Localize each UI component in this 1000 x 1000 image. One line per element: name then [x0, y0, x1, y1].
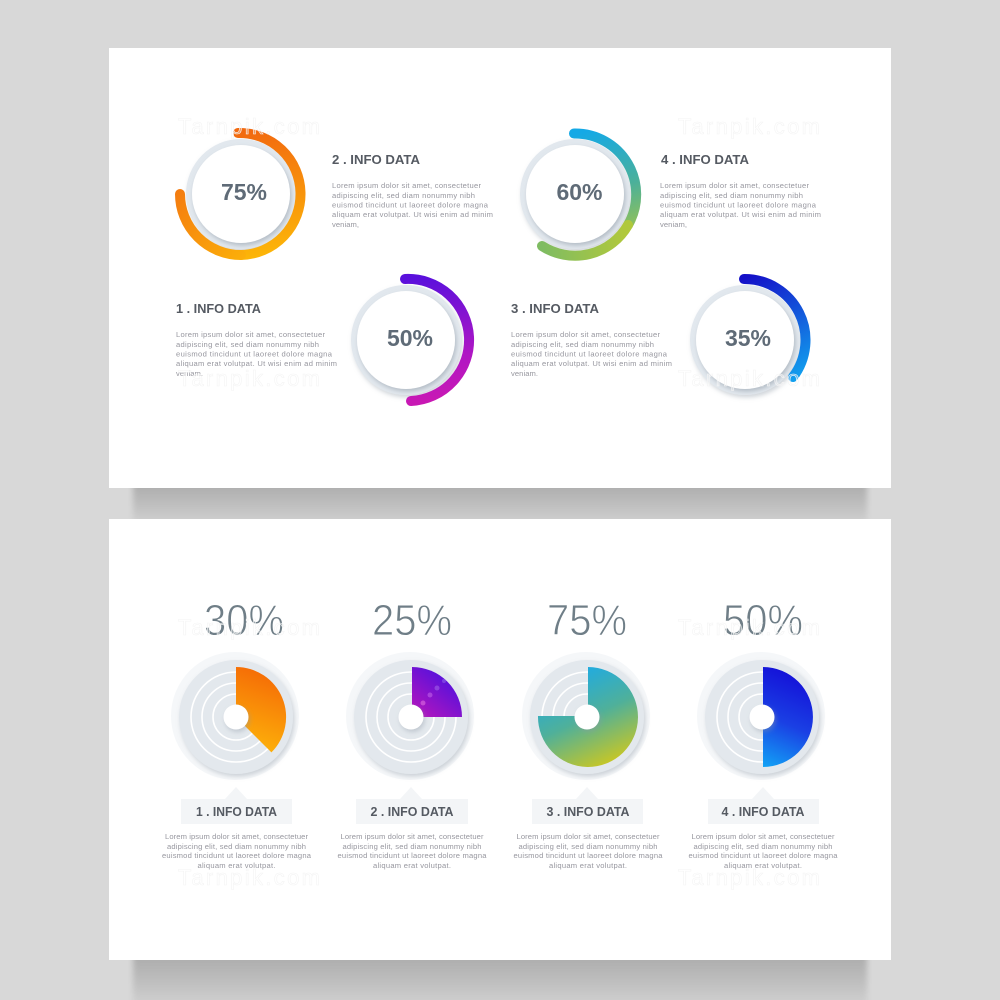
label: 2. info data: 2 . INFO DATA: [370, 805, 454, 819]
text block: column 4: aliquam erat volutpat.: [724, 861, 802, 870]
ring chart: 75%: [180, 133, 301, 255]
label: 1. info data: 1 . INFO DATA: [196, 805, 277, 819]
text block: column 4: [688, 832, 838, 870]
watermarks: Tarnpik.com: [178, 615, 320, 640]
text block: info 2: euismod tincidunt ut laoreet dolore magna: [332, 200, 489, 210]
panel: top ring charts: [109, 48, 891, 488]
text block: column 3: [514, 832, 663, 870]
label box: 1. info data: [181, 787, 292, 824]
label: 4. info data: 4 . INFO DATA: [722, 805, 804, 819]
text block: info 2: [332, 181, 493, 229]
text block: info 3: Lorem ipsum dolor sit amet, consectetuer: [511, 330, 660, 339]
heading: 3. info data: 3 . INFO DATA: [511, 302, 599, 316]
text block: column 3: aliquam erat volutpat.: [549, 861, 627, 870]
text block: info 1: veniam.: [176, 369, 203, 378]
watermarks: Tarnpik.com: [178, 114, 320, 139]
text block: column 3: adipiscing elit, sed diam nonummy nibh: [518, 842, 658, 851]
column 3: [514, 596, 663, 870]
text block: info 4: veniam,: [660, 220, 687, 229]
text block: info 4: [660, 181, 821, 229]
ring chart: 50%: [351, 279, 469, 401]
heading: 4. info data: 4 . INFO DATA: [661, 153, 749, 167]
text block: info 4: adipiscing elit, sed diam nonummy nibh: [660, 191, 803, 200]
heading: 1. info data: 1 . INFO DATA: [176, 302, 261, 316]
text block: column 2: euismod tincidunt ut laoreet dolore magna: [338, 851, 487, 860]
top panel shadow: [133, 480, 867, 522]
text block: info 3: adipiscing elit, sed diam nonummy nibh: [511, 340, 654, 349]
text block: column 3: euismod tincidunt ut laoreet dolore magna: [514, 851, 663, 860]
text block: info 4: aliquam erat volutpat. Ut wisi enim ad minim: [660, 210, 821, 219]
label box: 2. info data: [356, 787, 468, 824]
radial chart: 50%: [697, 652, 825, 780]
text block: info 2: Lorem ipsum dolor sit amet, consectetuer: [332, 181, 481, 190]
label: 3. info data: 3 . INFO DATA: [546, 805, 630, 819]
ring chart: 60%: [520, 133, 636, 256]
text block: info 2: aliquam erat volutpat. Ut wisi enim ad minim: [332, 210, 493, 219]
text block: info 2: adipiscing elit, sed diam nonummy nibh: [332, 191, 475, 200]
percentage: 30%: 30%: [204, 596, 284, 645]
radial chart: 30%: [171, 652, 299, 780]
text block: column 2: adipiscing elit, sed diam nonummy nibh: [342, 842, 482, 851]
text block: column 1: aliquam erat volutpat.: [198, 861, 276, 870]
text block: info 1: [176, 330, 337, 378]
ring chart: 35%: [690, 279, 806, 395]
ring chart: 75%: 75%: [221, 179, 267, 205]
radial chart: 25%: [346, 652, 474, 780]
text block: info 1: aliquam erat volutpat. Ut wisi enim ad minim: [176, 359, 337, 368]
text block: info 1: euismod tincidunt ut laoreet dolore magna: [176, 350, 333, 358]
watermarks: Tarnpik.com: [178, 865, 320, 890]
text block: column 1: [162, 832, 312, 870]
text block: column 1: adipiscing elit, sed diam nonummy nibh: [167, 842, 306, 851]
text block: column 1: Lorem ipsum dolor sit amet, consectetuer: [165, 832, 308, 841]
text block: column 2: aliquam erat volutpat.: [373, 861, 451, 870]
column 1: [162, 596, 312, 870]
watermarks: Tarnpik.com: [178, 366, 320, 391]
text block: column 2: [338, 832, 487, 870]
text block: info 2: veniam,: [332, 220, 359, 229]
text block: column 3: Lorem ipsum dolor sit amet, consectetuer: [516, 832, 660, 841]
percentage: 75%: 75%: [547, 596, 627, 645]
panel: bottom pie charts: [109, 519, 891, 960]
text block: info 3: euismod tincidunt ut laoreet dolore magna: [511, 350, 668, 358]
ring chart: 35%: 35%: [725, 325, 771, 351]
label box: 4. info data: [708, 787, 819, 824]
percentage: 25%: 25%: [372, 596, 452, 645]
column 2: [338, 596, 487, 870]
text block: info 1: Lorem ipsum dolor sit amet, consectetuer: [176, 330, 325, 339]
watermarks: Tarnpik.com: [678, 366, 820, 391]
radial chart: 75%: [522, 652, 650, 780]
label box: 3. info data: [532, 787, 643, 824]
text block: column 1: euismod tincidunt ut laoreet dolore magna: [162, 851, 312, 860]
ring chart: 50%: 50%: [387, 325, 433, 351]
bottom panel shadow: [133, 952, 867, 1000]
text block: info 4: Lorem ipsum dolor sit amet, consectetuer: [660, 181, 809, 190]
watermarks: Tarnpik.com: [678, 114, 820, 139]
text block: info 4: euismod tincidunt ut laoreet dolore magna: [660, 200, 817, 210]
watermarks: Tarnpik.com: [678, 865, 820, 890]
watermarks: Tarnpik.com: [678, 615, 820, 640]
column 4: [688, 596, 838, 870]
text block: column 4: Lorem ipsum dolor sit amet, consectetuer: [692, 832, 835, 841]
text block: info 3: veniam.: [511, 369, 538, 378]
percentage: 50%: 50%: [723, 596, 803, 645]
ring chart: 60%: 60%: [556, 179, 603, 205]
watermarks: [178, 114, 820, 890]
text block: info 1: adipiscing elit, sed diam nonummy nibh: [176, 340, 319, 349]
text block: column 4: euismod tincidunt ut laoreet dolore magna: [688, 851, 838, 860]
text block: column 4: adipiscing elit, sed diam nonummy nibh: [694, 842, 832, 851]
text block: column 2: Lorem ipsum dolor sit amet, consectetuer: [340, 832, 484, 841]
text block: info 3: aliquam erat volutpat. Ut wisi enim ad minim: [511, 359, 672, 368]
text block: info 3: [511, 330, 672, 378]
heading: 2. info data: 2 . INFO DATA: [332, 153, 420, 167]
